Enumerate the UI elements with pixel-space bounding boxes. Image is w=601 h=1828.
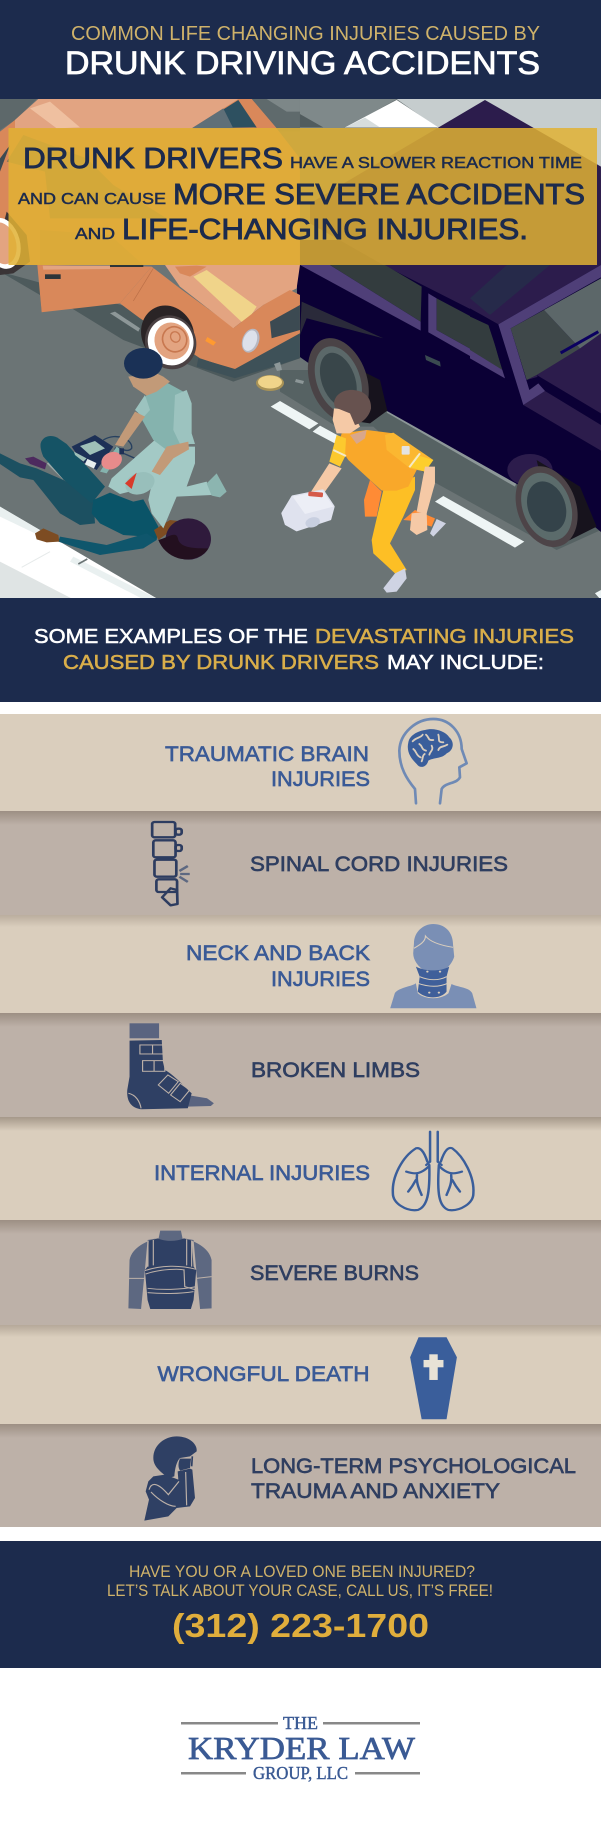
dark car wheels xyxy=(361,373,388,424)
row: spinal cord injuries xyxy=(0,811,601,915)
paramedic running with kit xyxy=(283,390,446,593)
dark car xyxy=(297,100,601,556)
icon: head with brain xyxy=(399,719,467,803)
row: wrongful death xyxy=(0,1325,601,1424)
call to action banner xyxy=(0,1541,601,1668)
row: long-term psychological trauma xyxy=(0,1424,601,1527)
callout text xyxy=(18,143,585,246)
icon: coffin xyxy=(410,1337,457,1419)
row: spinal cord injuries: SPINAL CORD INJURIES xyxy=(250,852,508,876)
row: internal injuries: INTERNAL INJURIES xyxy=(154,1161,370,1185)
row: traumatic brain injuries: INJURIES xyxy=(271,767,370,791)
header banner xyxy=(0,0,601,99)
icon: lungs xyxy=(393,1132,473,1210)
callout text: AND CAN CAUSE xyxy=(18,191,166,208)
orange car wheel xyxy=(141,306,194,348)
logo: The Kryder Law Group: GROUP, LLC xyxy=(253,1763,348,1783)
debris xyxy=(256,362,304,391)
callout text: HAVE A SLOWER REACTION TIME xyxy=(290,155,582,172)
curb xyxy=(0,507,158,599)
callout text: DRUNK DRIVERS xyxy=(23,143,283,175)
dark car windshield and hood xyxy=(470,265,601,451)
callout text: LIFE-CHANGING INJURIES. xyxy=(122,214,528,246)
section heading banner: DEVASTATING INJURIES xyxy=(315,625,574,648)
logo: The Kryder Law Group: THE xyxy=(283,1713,318,1733)
icon: spine xyxy=(152,822,190,905)
section heading banner: SOME EXAMPLES OF THE xyxy=(34,625,308,648)
icon: crying person xyxy=(144,1436,197,1521)
row: long-term psychological trauma: LONG-TERM PSYCHOLOGICAL xyxy=(251,1454,576,1478)
icon: person with neck brace xyxy=(390,924,476,1008)
row: long-term psychological trauma: TRAUMA AND ANXIETY xyxy=(251,1479,500,1503)
row: severe burns: SEVERE BURNS xyxy=(250,1261,419,1285)
row: broken limbs: BROKEN LIMBS xyxy=(251,1058,420,1082)
row: severe burns xyxy=(0,1220,601,1325)
callout text: AND xyxy=(75,226,115,243)
icon: bandaged torso xyxy=(128,1231,212,1309)
logo: The Kryder Law Group: KRYDER LAW xyxy=(188,1730,416,1766)
road shadow under dark car xyxy=(271,370,601,600)
row: neck and back injuries: NECK AND BACK xyxy=(186,941,371,965)
victim on the ground xyxy=(0,436,211,560)
paramedic kneeling with monitor xyxy=(72,348,227,528)
callout overlay xyxy=(8,128,597,265)
row: traumatic brain injuries: TRAUMATIC BRAIN xyxy=(165,742,369,766)
call to action banner: HAVE YOU OR A LOVED ONE BEEN INJURED? xyxy=(129,1562,475,1581)
row: broken limbs xyxy=(0,1013,601,1117)
row: traumatic brain injuries xyxy=(0,714,601,811)
row: neck and back injuries xyxy=(0,915,601,1013)
row: wrongful death: WRONGFUL DEATH xyxy=(158,1362,370,1386)
section heading banner: CAUSED BY DRUNK DRIVERS xyxy=(63,651,379,674)
section heading banner: MAY INCLUDE: xyxy=(387,651,544,674)
row: internal injuries xyxy=(0,1117,601,1220)
header title: DRUNK DRIVING ACCIDENTS xyxy=(65,45,540,81)
logo: The Kryder Law Group xyxy=(181,1713,420,1783)
phone number: (312) 223-1700 xyxy=(172,1607,429,1644)
illustration: crash scene xyxy=(0,99,601,600)
row: neck and back injuries: INJURIES xyxy=(271,967,370,991)
callout text: MORE SEVERE ACCIDENTS xyxy=(173,179,585,211)
icon: ankle brace xyxy=(127,1023,214,1109)
orange car xyxy=(0,99,300,378)
call to action banner: LET’S TALK ABOUT YOUR CASE, CALL US, IT’S FREE! xyxy=(107,1581,493,1600)
header subtitle: COMMON LIFE CHANGING INJURIES CAUSED BY xyxy=(71,22,540,45)
section heading banner xyxy=(0,598,601,702)
